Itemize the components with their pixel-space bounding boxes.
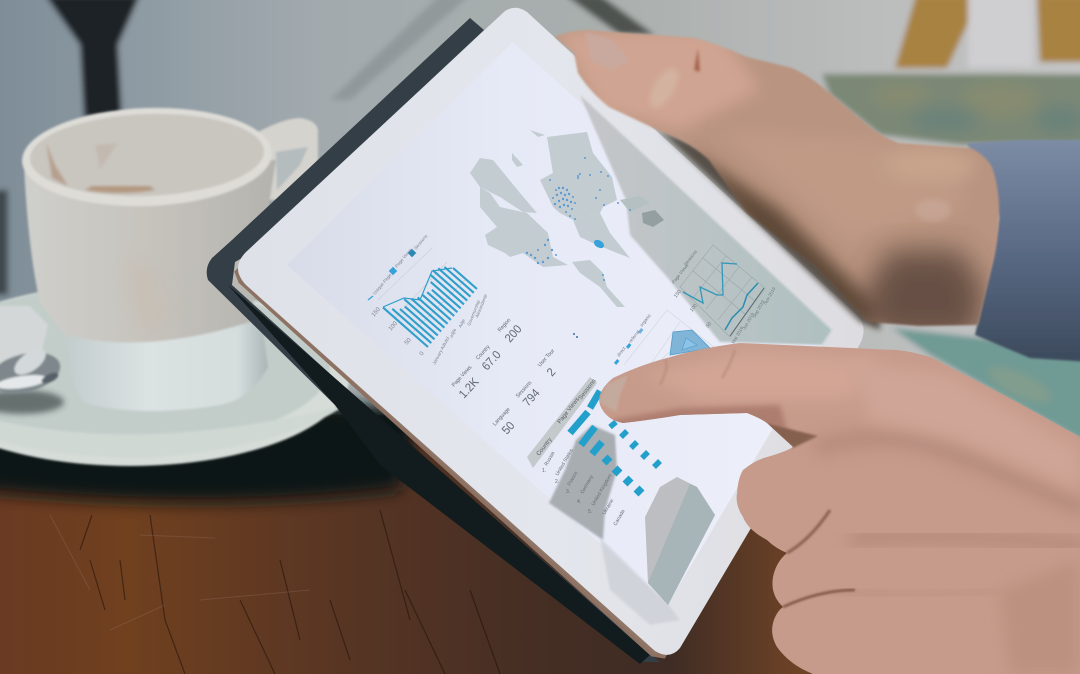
line chart	[671, 245, 777, 344]
chart legend: Alexanderite	[474, 293, 488, 318]
background: chair legs	[895, 0, 1080, 68]
tablet bezel	[238, 8, 864, 655]
background: patterned carpet lower	[892, 328, 1080, 445]
metrics: country: 67.0	[480, 349, 504, 373]
table rows: 5.	[588, 509, 592, 515]
cup inside	[29, 110, 265, 200]
chart legend: Governorship	[466, 299, 481, 326]
metrics: region: Region	[497, 317, 512, 333]
blurred background	[0, 0, 1080, 450]
tablet metal edge	[236, 268, 668, 657]
wrist highlight	[917, 200, 950, 220]
mid hand tone	[720, 130, 970, 240]
lower hand pointing at tablet	[590, 335, 1080, 674]
hand shadow on screen	[580, 95, 832, 345]
radar legend	[614, 312, 652, 365]
chart legend: Adlultd	[439, 336, 451, 350]
line chart legend: 100	[689, 303, 699, 313]
finger shade	[850, 536, 1080, 545]
coffee residue	[85, 186, 155, 193]
metrics: page views: Page Views	[451, 364, 474, 388]
line chart legend: 150	[673, 289, 683, 299]
tablet	[207, 8, 864, 664]
table rows: Germany	[580, 474, 595, 495]
metrics: sessions: 794	[521, 387, 543, 409]
saucer	[0, 284, 350, 466]
metrics: language: 50	[500, 420, 518, 437]
shadow under pointing finger	[765, 423, 818, 448]
table rows: France	[567, 470, 580, 487]
table header	[527, 377, 597, 468]
chart legend: Page Views	[394, 247, 413, 269]
index finger underside	[610, 405, 790, 440]
radar chart	[573, 310, 720, 380]
metrics: user tour: User Tour	[537, 348, 556, 368]
radar legend: organic	[639, 312, 652, 328]
thumb crease	[694, 48, 700, 72]
metrics: country	[475, 344, 504, 373]
radar legend: direct	[616, 345, 627, 358]
metrics: page views: 1.2K	[457, 376, 482, 401]
metrics: region	[497, 317, 525, 345]
back of hand light	[868, 370, 1076, 481]
chart legend: 100	[388, 320, 399, 332]
cup body	[24, 160, 276, 350]
ring finger gap	[783, 590, 855, 607]
metrics: user tour: 2	[545, 366, 558, 379]
middle finger gap	[787, 510, 830, 553]
metrics: user tour	[537, 348, 558, 379]
line chart legend: Mar 2019	[731, 325, 745, 344]
chart legend	[368, 233, 488, 365]
icon: spoon and napkin	[0, 306, 65, 414]
cup rim	[20, 104, 274, 210]
metrics: country: Country	[475, 344, 492, 361]
shadow between hand and tablet	[660, 130, 880, 330]
map: data points	[526, 157, 631, 281]
metrics: region: 200	[503, 323, 525, 345]
knuckle ridge	[815, 438, 1080, 510]
page curl shadow	[645, 477, 715, 605]
coffee cup	[20, 104, 318, 411]
tablet screen	[287, 42, 832, 604]
map: Australia	[642, 210, 664, 227]
dark underside of hand	[690, 150, 880, 330]
chart legend: 150	[371, 306, 382, 318]
table rows: 4.	[577, 499, 581, 505]
table rows: 2.	[555, 479, 559, 485]
upper hand holding tablet	[554, 29, 1000, 328]
fingernail	[600, 376, 627, 411]
table rows: United States	[555, 448, 575, 477]
line chart legend	[671, 249, 777, 344]
line chart legend: Jun 2019	[742, 312, 755, 330]
line chart legend: Sessions	[683, 249, 698, 267]
world map	[470, 130, 664, 307]
chart legend: 50	[404, 337, 413, 346]
table bars	[570, 391, 642, 494]
data table: Sessions	[578, 378, 598, 401]
background: diagonal bars	[330, 0, 470, 100]
data table: Page Views	[557, 397, 581, 425]
dark wrist shadow	[860, 250, 985, 340]
bar chart: page views and sessions	[368, 233, 488, 365]
finger shadow on screen	[549, 425, 617, 540]
table rows: Ukraine	[602, 498, 615, 516]
metrics: page views	[451, 364, 482, 401]
metrics: sessions: Sessions	[515, 380, 534, 399]
thumb nail	[586, 32, 628, 69]
chart legend: Sessions	[413, 233, 429, 251]
wooden table	[0, 405, 1000, 674]
radar legend: referral	[628, 329, 641, 344]
line chart legend: Sep 2019	[752, 299, 766, 318]
chart legend: Adje	[457, 318, 466, 328]
line chart legend: 50	[705, 321, 713, 329]
index finger highlight	[670, 356, 850, 394]
knuckle creases	[660, 350, 735, 385]
knuckle highlight	[651, 70, 677, 106]
map: highlighted country	[592, 238, 606, 250]
line chart legend: Page Views	[671, 262, 690, 285]
metrics: language	[492, 407, 518, 437]
cup lower band	[67, 322, 268, 411]
table rows: Russia	[544, 451, 556, 467]
background: patterned carpet upper	[822, 74, 1080, 145]
thumb colouring	[555, 30, 760, 130]
chart legend: 0	[419, 350, 426, 357]
cup handle	[258, 118, 318, 200]
chart legend: Unique Page Vi.	[372, 268, 397, 296]
data table: Country	[536, 437, 554, 457]
data table	[527, 377, 660, 527]
background: dark stand	[45, 0, 140, 118]
metrics: language: Language	[492, 407, 512, 427]
table rows	[542, 448, 627, 527]
sleeve	[967, 140, 1080, 362]
tablet cover	[207, 18, 660, 662]
table rows: 3.	[566, 489, 570, 495]
table rows: United Kingdom	[591, 473, 614, 507]
chart legend: January	[431, 348, 444, 365]
line chart legend: Nov 2019	[763, 286, 777, 306]
table rows: 1.	[542, 468, 546, 474]
metrics: sessions	[515, 380, 543, 409]
bezel reflection	[600, 538, 680, 625]
chart legend: adjfe	[448, 327, 458, 338]
table rows: Canada	[613, 509, 627, 527]
